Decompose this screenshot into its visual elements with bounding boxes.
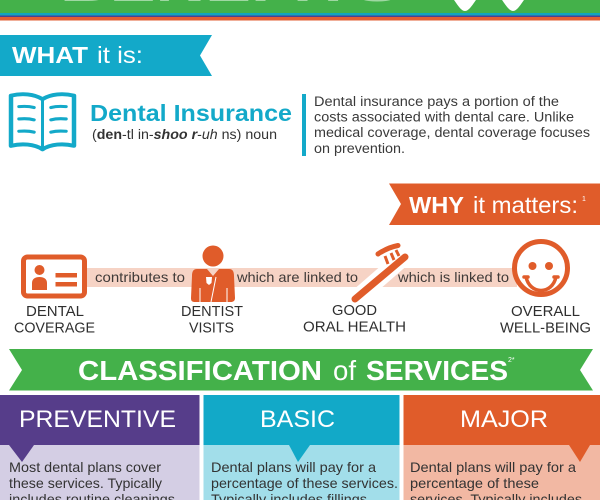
major text: Dental plans will pay for a <box>410 459 576 475</box>
heading: why it matters: WHY <box>409 192 464 218</box>
definition text: Dental insurance pays a portion of the <box>314 94 559 109</box>
band labels: which are linked to <box>236 269 358 285</box>
definition text <box>314 94 590 156</box>
header banner <box>0 0 600 20</box>
heading: classification of services: of <box>333 355 356 386</box>
band labels <box>95 269 509 285</box>
preventive text <box>9 459 175 500</box>
icon: open book <box>11 94 74 149</box>
major text <box>410 459 582 500</box>
step labels: DENTIST <box>181 303 243 320</box>
band labels: contributes to <box>95 269 185 285</box>
step labels: GOOD <box>332 302 377 319</box>
ribbon: why it matters <box>389 184 600 225</box>
footnote marker: 1 <box>582 196 586 203</box>
connector band <box>87 268 517 287</box>
icon: dentist <box>191 246 235 302</box>
term: dental insurance: Dental Insurance <box>90 100 292 126</box>
step labels: ORAL HEALTH <box>303 318 406 336</box>
panel: preventive <box>0 395 200 500</box>
preventive heading: PREVENTIVE <box>19 406 176 433</box>
preventive text: Most dental plans cover <box>9 459 161 475</box>
basic text: percentage of these services. <box>211 475 398 491</box>
major text: percentage of these <box>410 475 539 491</box>
panel: basic <box>204 395 400 500</box>
definition text: medical coverage, dental coverage focuses <box>314 125 590 140</box>
pronunciation: (den-tl in-shoo r-uh ns) noun <box>92 127 277 142</box>
heading: why it matters: it matters: <box>473 192 578 218</box>
step labels: VISITS <box>189 320 234 336</box>
heading: what it is: it is: <box>97 42 143 68</box>
major heading: MAJOR <box>460 406 548 433</box>
definition text: on prevention. <box>314 141 405 156</box>
icon: smiley <box>514 242 568 294</box>
band labels: which is linked to <box>397 269 509 285</box>
step labels: WELL-BEING <box>500 320 591 336</box>
footnote marker: 2* <box>508 357 515 364</box>
basic text: Dental plans will pay for a <box>211 459 376 475</box>
ribbon: what it is <box>0 35 212 76</box>
icon: toothbrush <box>355 246 405 299</box>
heading: classification of services: CLASSIFICATION <box>78 355 322 386</box>
panel: major <box>404 395 600 500</box>
ribbon: classification of services <box>9 349 593 390</box>
step labels <box>14 302 591 336</box>
basic heading: BASIC <box>260 406 335 433</box>
basic text <box>211 459 398 500</box>
step labels: DENTAL <box>26 303 84 320</box>
icon: insurance card <box>24 257 84 296</box>
heading: classification of services: SERVICES <box>366 355 508 386</box>
icon: tooth roots <box>454 0 524 11</box>
step labels: COVERAGE <box>14 320 95 336</box>
step labels: OVERALL <box>511 303 580 320</box>
heading: what it is: WHAT <box>12 42 88 68</box>
divider <box>302 94 306 156</box>
preventive text: these services. Typically <box>9 475 162 491</box>
definition text: costs associated with dental care. Unlike <box>314 110 574 124</box>
